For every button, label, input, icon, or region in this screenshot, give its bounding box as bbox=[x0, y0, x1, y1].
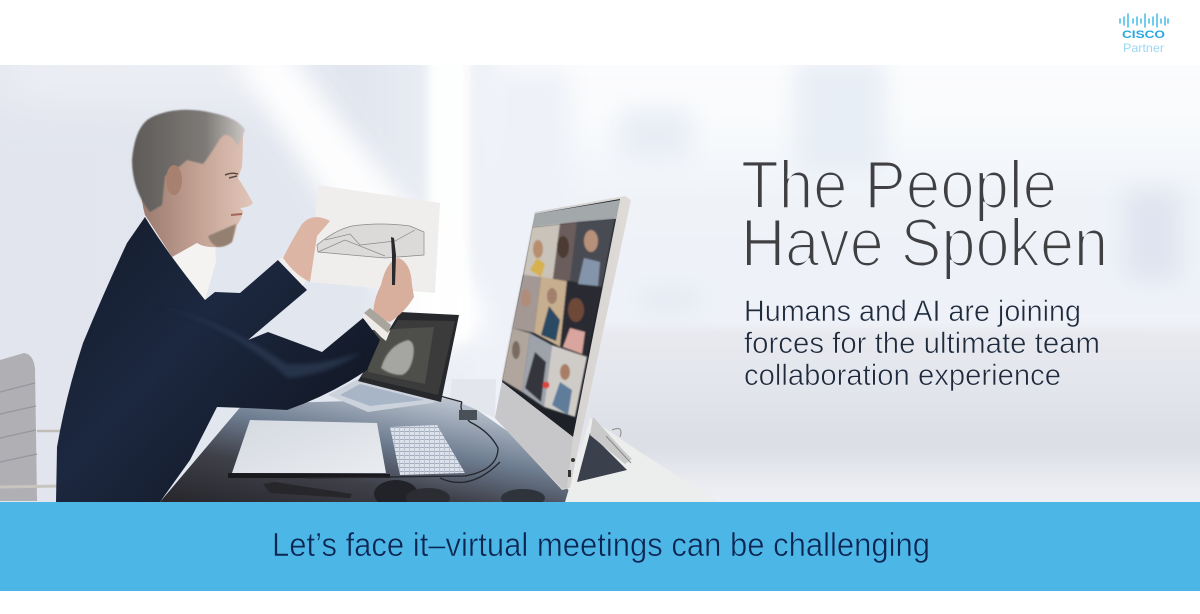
jacket bbox=[56, 217, 380, 502]
chair bbox=[0, 353, 60, 501]
title line 1: The People bbox=[741, 147, 1057, 223]
adapter bbox=[459, 410, 477, 420]
beard bbox=[208, 224, 236, 247]
bezel bbox=[495, 196, 631, 490]
wristwatch bbox=[364, 308, 391, 333]
desk right side, bright bbox=[565, 418, 662, 502]
headphones bbox=[374, 480, 450, 502]
video tiles bbox=[502, 219, 615, 417]
jacket sleeve highlights bbox=[217, 326, 356, 378]
video conferencing display bbox=[495, 196, 631, 490]
tablet on desk bbox=[228, 420, 390, 478]
laptop bbox=[328, 312, 459, 412]
car thumbnail on laptop bbox=[381, 340, 414, 375]
subtitle line 2: forces for the ultimate team bbox=[744, 327, 1100, 360]
speaker fabric bbox=[495, 382, 573, 488]
title line 2: Have Spoken bbox=[741, 205, 1108, 281]
right hand bbox=[373, 258, 414, 322]
subtitle bbox=[744, 295, 1100, 392]
title bbox=[741, 147, 1108, 281]
stylus bbox=[263, 482, 352, 498]
mouse bbox=[501, 489, 545, 502]
subtitle line 3: collaboration experience bbox=[744, 359, 1061, 392]
subtitle line 1: Humans and AI are joining bbox=[744, 295, 1081, 328]
Partner wordmark: Partner bbox=[1123, 41, 1164, 55]
blurred office background bbox=[0, 65, 1200, 502]
left cuff bbox=[278, 256, 306, 286]
cables bbox=[306, 396, 500, 482]
man bbox=[56, 110, 440, 502]
right cuff bbox=[362, 312, 390, 341]
hair bbox=[132, 110, 245, 212]
desk surface bbox=[160, 398, 580, 502]
CISCO wordmark: CISCO bbox=[1122, 29, 1166, 41]
display stand bbox=[577, 417, 632, 482]
sketch paper bbox=[310, 185, 440, 293]
participant faces bbox=[533, 240, 543, 258]
papers behind laptop bbox=[450, 379, 496, 418]
eye bbox=[225, 173, 238, 178]
logo bars bbox=[1120, 14, 1168, 27]
Cisco Partner logo bbox=[1120, 14, 1168, 55]
ports bbox=[571, 458, 575, 462]
screen bbox=[502, 199, 620, 437]
mouth bbox=[231, 214, 242, 215]
photo: man at a video meeting bbox=[0, 65, 1200, 502]
left hand bbox=[283, 217, 330, 282]
blue banner bbox=[0, 502, 1200, 591]
banner text: Let’s face it–virtual meetings can be challenging bbox=[272, 526, 930, 563]
head bbox=[141, 131, 253, 257]
neck and shirt bbox=[145, 216, 216, 300]
car sketch bbox=[317, 224, 424, 258]
keyboard bbox=[390, 425, 465, 475]
ear bbox=[166, 165, 182, 195]
pen bbox=[391, 237, 396, 285]
